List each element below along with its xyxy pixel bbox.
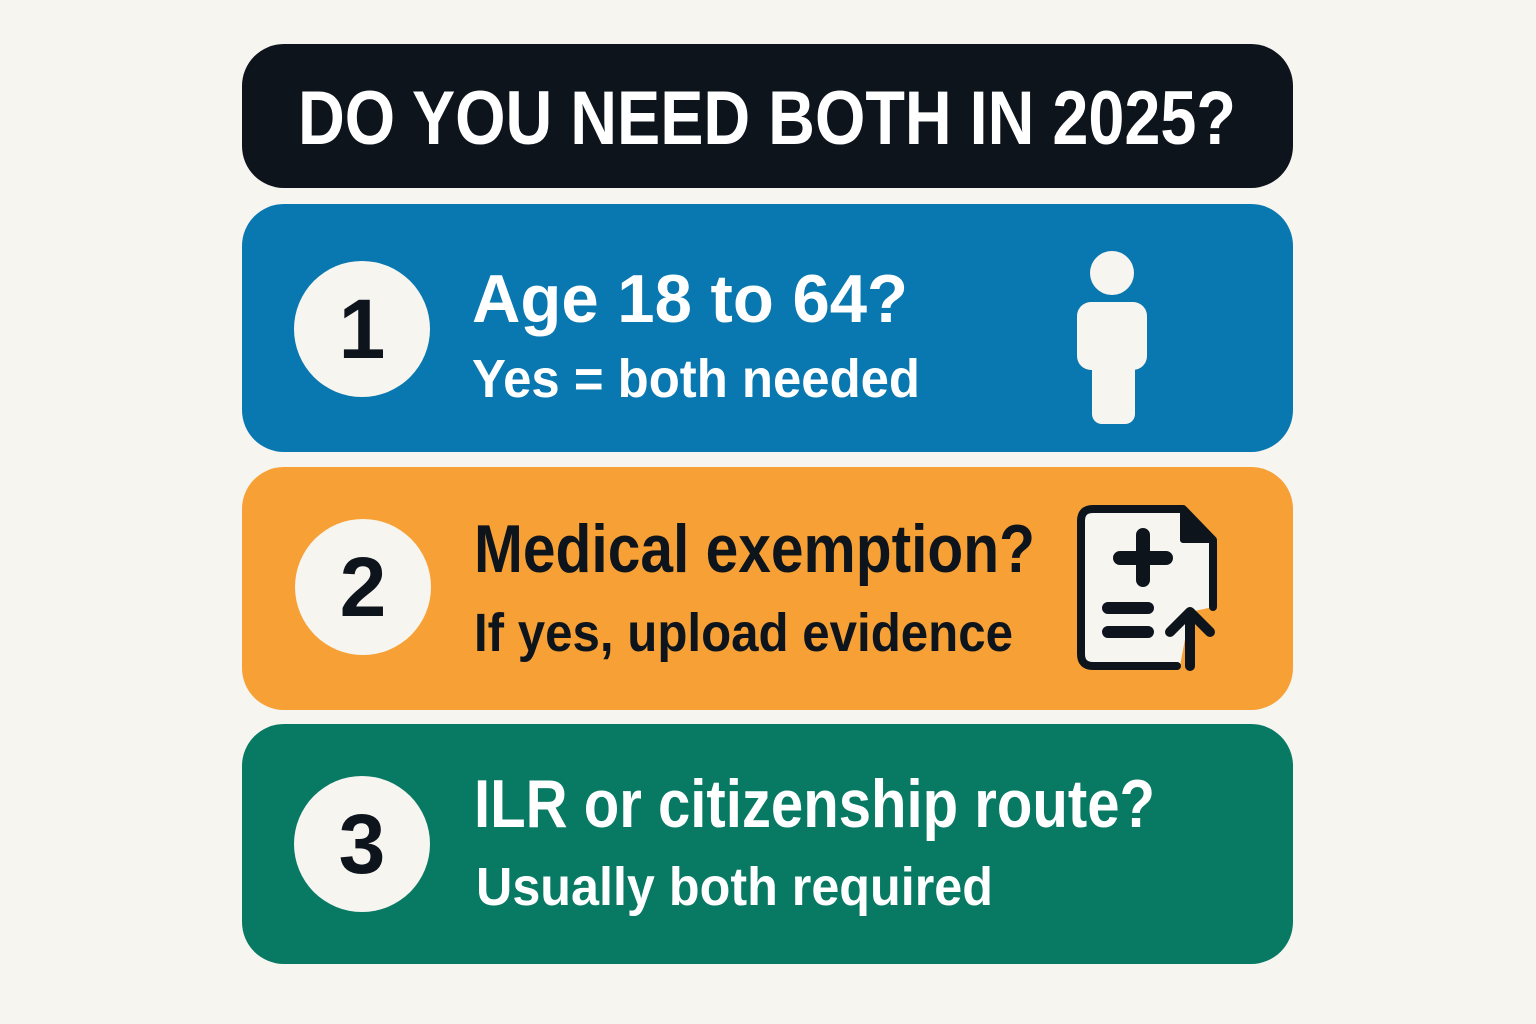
- subtext: ILR: Usually both required: [476, 857, 993, 917]
- number 2: 2: [340, 540, 386, 634]
- title: [242, 44, 1293, 188]
- number 1: 1: [339, 282, 385, 376]
- panel: medical: [242, 467, 1293, 710]
- number 3: [294, 776, 430, 912]
- icon: document upload: [1081, 509, 1213, 666]
- number 1: [294, 261, 430, 397]
- icon: person: [1077, 251, 1147, 424]
- heading: ILR: ILR or citizenship route?: [474, 766, 1155, 842]
- heading: medical: Medical exemption?: [474, 511, 1035, 587]
- number 2: [295, 519, 431, 655]
- panel: ILR: [242, 724, 1293, 964]
- subtext: medical: If yes, upload evidence: [474, 603, 1013, 663]
- panel: age: [242, 204, 1293, 452]
- heading: age: Age 18 to 64?: [472, 261, 908, 337]
- subtext: age: Yes = both needed: [472, 349, 920, 409]
- number 3: 3: [339, 797, 385, 891]
- title: DO YOU NEED BOTH IN 2025?: [298, 76, 1236, 161]
